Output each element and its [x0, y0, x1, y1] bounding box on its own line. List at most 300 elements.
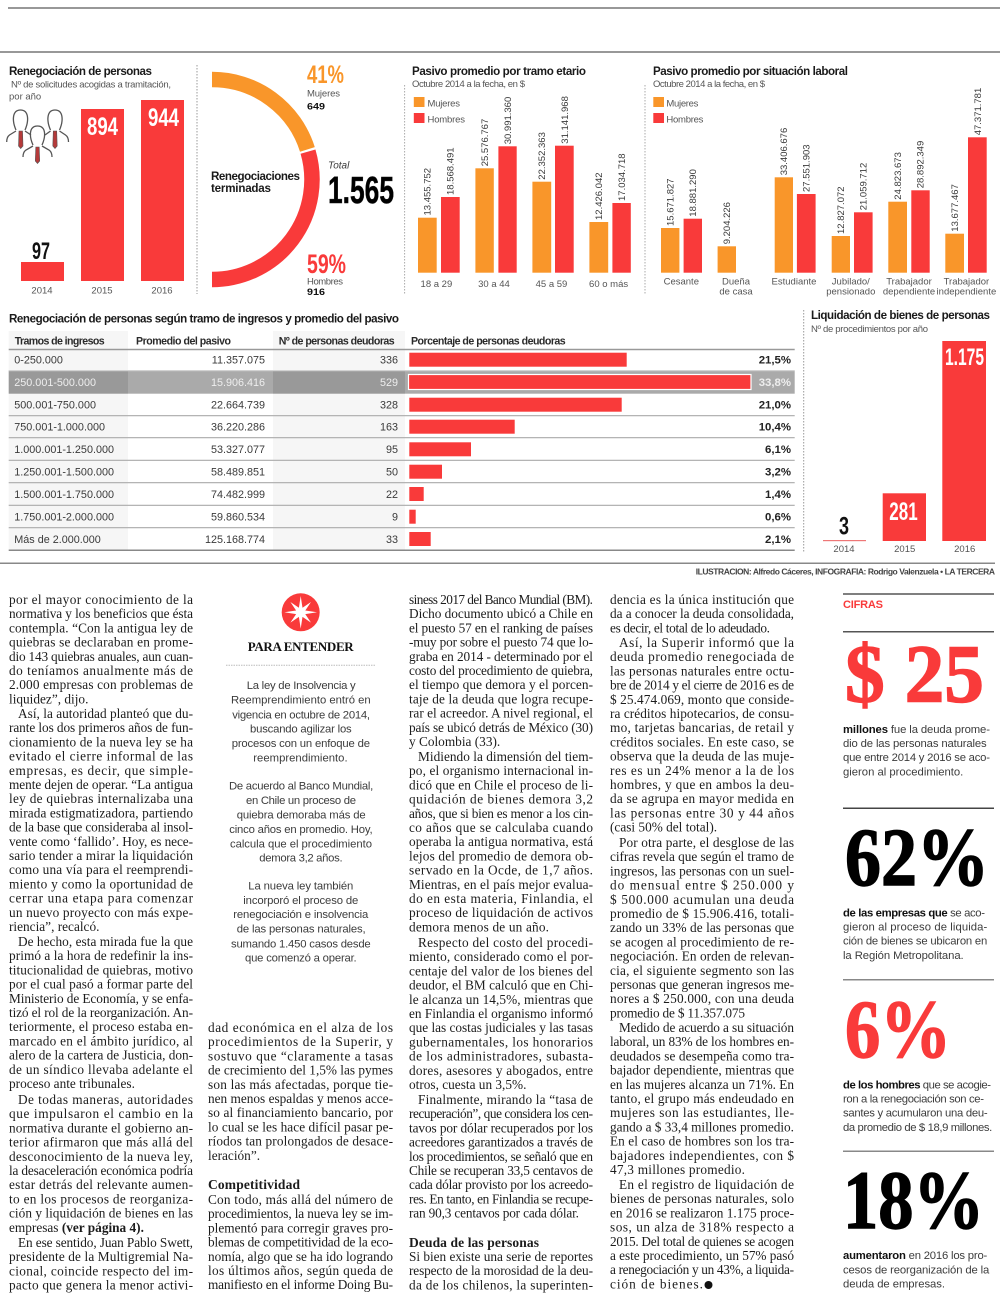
bar chart: situación laboral: 27.551.903: [802, 144, 812, 192]
article column 1: riencia”, recalcó.: [9, 919, 99, 934]
heading: PARA ENTENDER: [248, 639, 354, 654]
panel: para entender: [226, 593, 376, 965]
article column 4: Así, la Superir informó que la: [619, 635, 794, 650]
article column 1: la desaceleración económica podría: [9, 1163, 193, 1178]
column: porcentaje: 2,1%: [765, 534, 791, 546]
article column 2: de crecimiento del 1,5% las pymes: [208, 1063, 393, 1078]
article column 3: respecto de la morosidad de la deu-: [409, 1263, 593, 1278]
article column 3: [409, 592, 593, 1292]
article column 1: quiebras se declaraban en prome-: [9, 635, 193, 650]
article column 3: operaba la antigua normativa, está: [409, 834, 593, 849]
stat: 6%: santes y acumularon una deu-: [843, 1108, 988, 1120]
column: tramos de ingresos: Más de 2.000.000: [14, 534, 101, 546]
article column 1: empresas, es decir, que simple-: [9, 763, 193, 778]
panel: cifras: [843, 594, 994, 1291]
article column 3: rar el acreedor. A nivel regional, el: [409, 706, 593, 721]
legend: Hombres: [666, 114, 704, 126]
article column 1: primó a la hora de redefinir la ins-: [9, 948, 193, 963]
article column 3: co años que se calculaba cuando: [409, 820, 593, 835]
label: hombres: 59%: [307, 249, 346, 279]
bar chart: liquidaciones por año: 2015: [894, 544, 915, 555]
article column 3: ran 90,3 centavos por cada dólar.: [409, 1206, 579, 1221]
bar chart: tramo etario: 18 a 29: [421, 279, 452, 290]
article column 1: mirada estigmatizadora, partiendo: [9, 805, 193, 820]
bar chart: situación laboral: de casa: [719, 286, 753, 298]
article column 4: laboral, un 83% de los hombres en-: [610, 1034, 794, 1049]
bar chart: situación laboral: 18.881.290: [688, 169, 699, 217]
bar chart: tramo etario: 60 o más: [589, 279, 628, 290]
text block: sumando 1.450 casos desde: [231, 938, 371, 950]
text block: buscando agilizar los: [250, 724, 352, 736]
bar chart: tramo etario: 13.455.752: [423, 168, 434, 216]
bar chart: situación laboral: Trabajador: [886, 276, 932, 288]
panel: renegociaciones terminadas: [211, 61, 394, 298]
bar chart: tramo etario: 45 a 59: [536, 279, 567, 290]
article column 4: a este procedimiento, un 57% pasó: [610, 1248, 794, 1263]
article column 1: cional, coincide respecto del im-: [9, 1263, 193, 1278]
column: tramos de ingresos: 250.001-500.000: [14, 377, 96, 389]
article column 1: presidente de la Multigremial Na-: [9, 1249, 193, 1264]
text block: calcula que el procedimiento: [230, 838, 372, 850]
article column 3: que las costas judiciales y las tasas: [409, 1020, 593, 1035]
article column 3: cada dólar provisto por los acreedo-: [409, 1177, 593, 1192]
article column 3: servado en la Ocde, de 1,7 años.: [409, 863, 593, 878]
bar chart: solicitudes por año: 2016: [151, 286, 173, 296]
article column 1: pacto que genera la menor activi-: [9, 1278, 193, 1293]
bar chart: liquidaciones por año: [823, 341, 986, 555]
article column 4: personas que generan ingresos me-: [610, 977, 794, 992]
article column 2: sostuvo que “claramente a tasas: [208, 1048, 393, 1063]
stat: 25 millones: [843, 628, 990, 779]
column: tramos de ingresos: 1.750.001-2.000.000: [14, 512, 114, 524]
column: promedio del pasivo: 74.482.999: [211, 489, 265, 501]
article column 1: cerrar una etapa para comenzar: [9, 891, 194, 906]
article column 2: [208, 1020, 394, 1292]
article column 3: dicó que en Chile el proceso de li-: [409, 777, 593, 792]
legend: Mujeres: [428, 98, 460, 110]
bar chart: liquidaciones por año: 2016: [954, 544, 975, 555]
column: tramos de ingresos: 1.000.001-1.250.000: [14, 444, 114, 456]
heading: Liquidación de bienes de personas: [811, 309, 990, 322]
article column 4: bre de 2014 y el cierre de 2016 es de: [610, 678, 794, 693]
legend: Mujeres: [666, 98, 699, 110]
legend: [653, 97, 704, 126]
column: porcentaje: 33,8%: [759, 377, 791, 389]
legend: Hombres: [428, 114, 465, 126]
stat: 6%: da promedio de $ 18,9 millones.: [843, 1122, 992, 1134]
heading: CIFRAS: [843, 599, 883, 611]
stat: 6%: ron a la renegociación son ce-: [843, 1093, 984, 1105]
table header: [15, 336, 566, 348]
stat: 18%: [843, 1154, 990, 1291]
article column 4: (casi 50% del total).: [610, 820, 717, 835]
stat: 62%: la Región Metropolitana.: [843, 950, 964, 962]
bar chart: tramo etario: 31.141.968: [560, 96, 571, 144]
article column 3: gubernamentales, los honorarios: [409, 1034, 593, 1049]
column: promedio del pasivo: 53.327.077: [211, 444, 265, 456]
article column 2: nomía, algo que se ha ido logrando: [208, 1249, 393, 1264]
bar chart: liquidaciones por año: 281: [889, 498, 918, 526]
article column 2: Competitividad: [208, 1177, 300, 1192]
stat: 25 millones: $ 25: [845, 628, 984, 720]
bar chart: situación laboral: Cesante: [664, 276, 699, 288]
article column 4: promedio de $ 11.357.075: [610, 1005, 745, 1020]
bar chart: solicitudes por año: 2015: [91, 286, 113, 296]
label: centre heading: terminadas: [211, 182, 271, 195]
article column 4: cifras revela que según el tramo de: [610, 849, 794, 864]
column: porcentaje: [759, 355, 791, 546]
article column 1: tizó el rol de la reorganización. An-: [9, 1005, 193, 1020]
bar chart: situación laboral: dependiente: [883, 286, 935, 298]
article column 1: De todas maneras, autoridades: [18, 1092, 193, 1107]
article column 3: res. En tanto, en Finlandia se recupe-: [409, 1191, 593, 1206]
article column 4: En el registro de liquidación de: [619, 1177, 794, 1192]
panel: pasivo por tramo etario: [412, 65, 631, 290]
heading: Pasivo promedio por situación laboral: [653, 65, 848, 78]
article column 4: Medido de acuerdo a su situación: [619, 1020, 794, 1035]
legend: [414, 97, 465, 126]
article column 1: desconocimiento de la nueva ley,: [9, 1149, 193, 1164]
bar chart: situación laboral: 33.406.676: [779, 128, 790, 175]
article column 1: por el mayor conocimiento de la: [9, 592, 193, 607]
label: mujeres: [307, 61, 344, 112]
column: tramos de ingresos: 500.001-750.000: [14, 400, 96, 412]
column: promedio del pasivo: 36.220.286: [211, 422, 265, 434]
article column 1: mente dejen de operar. “La antigua: [9, 777, 193, 792]
article column 4: [610, 592, 794, 1291]
article column 4: bajador dependiente, mientras que: [610, 1063, 794, 1078]
article column 4: se acogen al procedimiento de re-: [610, 934, 794, 949]
icon: compass star: [282, 593, 320, 631]
article column 4: 2015. Del total de quienes se acogen: [610, 1234, 794, 1249]
article column 3: acreedores garantizados a través de: [409, 1135, 593, 1150]
column: porcentaje: 6,1%: [765, 444, 791, 456]
article column 1: ley de quiebras internalizaba una: [9, 791, 193, 806]
article column 4: $ 500.000 acumulan una deuda: [610, 892, 794, 907]
column: tramos de ingresos: [14, 354, 114, 546]
table header: Nº de personas deudoras: [279, 336, 395, 348]
article column 1: En ese sentido, Juan Pablo Swett,: [18, 1235, 193, 1250]
column: personas deudoras: 33: [386, 534, 398, 546]
article column 3: siness 2017 del Banco Mundial (BM).: [409, 592, 593, 607]
article column 4: dencia es la única institución que: [610, 592, 794, 607]
stat: 6%: 6%: [845, 983, 951, 1075]
column: porcentaje: 1,4%: [765, 489, 791, 501]
stat: 6%: de los hombres que se acogie-: [843, 1079, 991, 1091]
article column 1: de la base que consideraba al insol-: [9, 820, 193, 835]
article column 3: Mientras, en el país mejor evalua-: [409, 877, 593, 892]
article column 1: miento y como la oportunidad de: [9, 876, 193, 891]
article column 3: tavos por dólar recuperados por los: [409, 1120, 593, 1135]
stat: 62%: [843, 811, 989, 962]
article column 2: los últimos años, según queda de: [208, 1263, 393, 1278]
article column 4: hombres, y que en ambos la deu-: [610, 777, 794, 792]
article column 1: empresas (ver página 4).: [9, 1220, 144, 1235]
article column 4: do mensual entre $ 250.000 y: [610, 878, 794, 893]
article column 3: le alcanza un 14,5%, mientras que: [409, 992, 593, 1007]
article column 1: 2.000 empresas con problemas de: [9, 677, 193, 692]
article column 1: [9, 592, 194, 1293]
bar chart: situación laboral: 47.371.781: [973, 88, 984, 135]
bar chart: situación laboral: Dueña: [722, 276, 751, 288]
label: hombres: Hombres: [307, 276, 343, 288]
article column 2: nen menos espaldas y menos acce-: [208, 1091, 393, 1106]
bar chart: situación laboral: 15.671.827: [666, 178, 676, 226]
article column 2: procedimientos, la nueva ley se im-: [208, 1206, 393, 1221]
article column 1: normativa y los beneficios que ésta: [9, 606, 193, 621]
article column 3: y Colombia (33).: [409, 734, 500, 749]
text block: La ley de Insolvencia y: [247, 680, 356, 692]
article column 4: las personas naturales entre octu-: [610, 663, 794, 678]
article column 4: ción de bienes.: [610, 1276, 703, 1291]
article column 3: Chile se recuperan 33,5 centavos de: [409, 1163, 593, 1178]
bar chart: tramo etario: 22.352.363: [537, 132, 548, 180]
article column 1: sario tender a mirar la liquidación: [9, 848, 193, 863]
subtitle: Nº de procedimientos por año: [811, 324, 928, 335]
article column 4: deudados se desempeña como tra-: [610, 1048, 794, 1063]
column: porcentaje: 0,6%: [765, 512, 791, 524]
column: promedio del pasivo: 125.168.774: [205, 534, 265, 546]
article column 1: proceso ante tribunales.: [9, 1076, 135, 1091]
article column 3: recuperación”, que considera los cen-: [409, 1106, 593, 1121]
article column 1: do teníamos anualmente más de: [9, 663, 193, 678]
article column 3: años, que si bien es menor a los cin-: [409, 806, 593, 821]
article column 2: leración”.: [208, 1148, 260, 1163]
bar chart: tramo etario: 30.991.360: [503, 97, 514, 144]
article column 3: quidación de bienes demora 3,2: [409, 792, 593, 807]
icon: three people with ties: [7, 110, 68, 164]
stat: 18%: cesos de reorganización de la: [843, 1264, 990, 1276]
article column 4: mo, tarjetas bancarias, de retail y: [610, 720, 794, 735]
article column 4: gando a $ 33,4 millones promedio.: [610, 1119, 794, 1134]
article column 4: promedio de $ 15.906.416, totali-: [610, 906, 794, 921]
article column 1: titucionalidad de quiebras, motivo: [9, 962, 193, 977]
article column 3: costo del procedimiento de quiebra,: [409, 663, 593, 678]
article column 3: país se ubicó detrás de México (30): [409, 720, 593, 735]
label: centre heading: Renegociaciones: [211, 170, 300, 183]
column: tramos de ingresos: 0-250.000: [14, 354, 63, 366]
article column 4: $ 25.474.069, monto que conside-: [610, 692, 794, 707]
article column 4: negociación. En orden de relevan-: [610, 949, 794, 964]
article column 2: blemas de competitividad de la eco-: [208, 1235, 393, 1250]
column: promedio del pasivo: 15.906.416: [211, 377, 265, 389]
bar chart: situación laboral: 9.204.226: [722, 202, 733, 244]
semicircle chart: [212, 79, 312, 279]
article column 2: manifiesto en el informe Doing Bu-: [208, 1277, 393, 1292]
article column 1: alero de la cartera de Justicia, don-: [9, 1048, 193, 1063]
subtitle: Nº de solicitudes acogidas a tramitación,: [11, 80, 171, 90]
column: porcentaje: 10,4%: [759, 422, 791, 434]
stat: 25 millones: que entre 2014 y 2016 se aco-: [843, 752, 990, 764]
article column 1: De hecho, esta mirada fue la que: [18, 934, 193, 949]
column: personas deudoras: 50: [386, 466, 398, 478]
column: personas deudoras: 336: [380, 354, 398, 366]
label: total: 1.565: [328, 170, 394, 212]
column: personas deudoras: 9: [392, 512, 398, 524]
heading: Renegociación de personas según tramo de ingresos y promedio del pasivo: [9, 312, 399, 326]
article column 4: deuda promedio renegociada de: [610, 649, 794, 664]
column: personas deudoras: 163: [380, 422, 398, 434]
article column 1: rante los dos primeros años de fun-: [9, 720, 193, 735]
column: tramos de ingresos: 750.001-1.000.000: [14, 422, 105, 434]
article column 1: liquidez”, dijo.: [9, 691, 88, 706]
text block: quiebra demoraba más de: [237, 809, 366, 821]
table header: Tramos de ingresos: [15, 336, 105, 348]
article column 2: ríodos tan prolongados de desace-: [208, 1134, 393, 1149]
article column 4: sos, un alza de 318% respecto a: [610, 1220, 794, 1235]
column: promedio del pasivo: 22.664.739: [211, 400, 265, 412]
table stripes and highlight row: [9, 331, 795, 550]
text block: Reemprendimiento entró en: [231, 695, 371, 707]
table header: Promedio del pasivo: [136, 336, 232, 348]
bar chart: situación laboral: independiente: [937, 286, 996, 298]
article column 3: de los administradores, subasta-: [409, 1049, 593, 1064]
article column 3: demora menos de un año.: [409, 919, 549, 934]
text block: De acuerdo al Banco Mundial,: [229, 781, 373, 793]
bar chart: situación laboral: pensionado: [826, 286, 875, 298]
article column 3: el puesto 57 en el ranking de países: [409, 620, 593, 635]
article column 1: Ministerio de Economía, y se enfa-: [9, 991, 193, 1006]
article column 3: lejos del promedio de demora ob-: [409, 848, 593, 863]
bar chart: liquidaciones por año: 2014: [833, 544, 855, 555]
bar chart: liquidaciones por año: 3: [839, 512, 849, 540]
bar chart: tramo etario: 30 a 44: [478, 279, 510, 290]
stat: 62%: gieron al proceso de liquida-: [843, 921, 988, 933]
text block: procesos con un enfoque de: [232, 738, 370, 750]
column: personas deudoras: 328: [380, 400, 398, 412]
article column 3: da de los chilenos, la superinten-: [409, 1277, 593, 1292]
article column 3: graba en 2014 - determinado por el: [409, 649, 593, 664]
bar chart: tramo etario: 12.426.042: [594, 172, 605, 220]
label: total: [328, 160, 394, 212]
column: promedio del pasivo: 59.860.534: [211, 512, 265, 524]
article column 3: taje de la deuda que logra recupe-: [409, 691, 593, 706]
bar chart: situación laboral: 12.827.072: [836, 186, 847, 234]
bar chart: solicitudes por año: 894: [87, 113, 118, 141]
article column 4: Por otra parte, el desglose de las: [619, 835, 794, 850]
article column 3: deudor, el BM calculó que en Chi-: [409, 978, 593, 993]
article column 2: lo cual se les hace difícil pasar pe-: [208, 1119, 393, 1134]
article column 1: como una vía para el reemprendi-: [9, 862, 193, 877]
subtitle: [9, 80, 171, 102]
article column 1: vente como ‘fallido’. Hoy, es nece-: [9, 834, 193, 849]
column: promedio del pasivo: 58.489.851: [211, 466, 265, 478]
bar chart: tramo etario: 17.034.718: [617, 153, 628, 201]
stat: 62%: de las empresas que se aco-: [843, 907, 985, 919]
article column 4: ingresos, las personas con un suel-: [610, 863, 794, 878]
bar chart: situación laboral: [661, 88, 996, 298]
article column 3: centaje del valor de los bienes del: [409, 963, 593, 978]
article column 3: en Finlandia el organismo informó: [409, 1006, 593, 1021]
article column 4: da se agrupa en mayor medida en: [610, 791, 794, 806]
article column 2: procedimientos de la Superir, y: [208, 1034, 393, 1049]
article column 2: so al financiamiento bancario, por: [208, 1105, 394, 1120]
text block: cinco años en promedio. Hoy,: [229, 824, 373, 836]
bar chart: tramo etario: 25.576.767: [480, 119, 491, 166]
article column 3: po, el organismo internacional in-: [409, 763, 593, 778]
article column 1: teriormente, el proceso estaba en-: [9, 1019, 193, 1034]
text block: demora 3,2 años.: [259, 852, 343, 864]
stat: 25 millones: gieron al procedimiento.: [843, 767, 963, 779]
text block: de las personas naturales,: [237, 923, 366, 935]
credits: ILUSTRACION: Alfredo Cáceres, INFOGRAFIA: Rodrigo Valenzuela • LA TERCERA: [696, 566, 995, 576]
article column 3: los procedimientos, se señaló que en: [409, 1149, 593, 1164]
label: hombres: [307, 249, 346, 298]
percentage bars: [408, 353, 751, 546]
panel: renegociación de personas: [7, 65, 184, 296]
label: hombres: 916: [307, 287, 325, 298]
article column 3: Midiendo la dimensión del tiem-: [418, 749, 593, 764]
stat: 25 millones: dio de las personas naturales: [843, 738, 987, 750]
article column 4: nores a $ 250.000, con una deuda: [610, 991, 794, 1006]
panel: tabla de ingresos: [9, 312, 795, 550]
panel: liquidación de bienes: [811, 309, 990, 555]
stat: 18%: deuda de empresas.: [843, 1279, 945, 1291]
article column 4: en las mujeres alcanza un 71%. En: [610, 1077, 794, 1092]
label: mujeres: Mujeres: [307, 88, 340, 100]
table rules: [9, 350, 795, 550]
bar chart: solicitudes por año: [21, 100, 184, 296]
article column 3: dores, asesores y abogados, entre: [409, 1063, 593, 1078]
label: centre heading: [211, 170, 300, 195]
article column 1: Así, la autoridad planteó que du-: [18, 706, 193, 721]
article column 2: plementó para corregir graves pro-: [208, 1220, 393, 1235]
article column 4: 47,3 millones promedio.: [610, 1162, 745, 1177]
article column 1: terior afirmaron que más allá del: [9, 1135, 193, 1150]
text block: renegociación e insolvencia: [233, 909, 369, 921]
column: porcentaje: 21,5%: [759, 355, 791, 367]
article column 3: Dicho documento ubicó a Chile en: [409, 606, 593, 621]
column: tramos de ingresos: 1.250.001-1.500.000: [14, 466, 114, 478]
article column 1: por el cual pasó a formar parte del: [9, 977, 193, 992]
article column 3: Finalmente, mirando la “tasa de: [418, 1092, 593, 1107]
bar chart: solicitudes por año: 944: [148, 104, 179, 132]
table header: Porcentaje de personas deudoras: [411, 336, 566, 348]
article column 1: de un síndico llevaba adelante el: [9, 1062, 193, 1077]
article column 4: bajadores independientes, con $: [610, 1148, 794, 1163]
article column 4: En el caso de hombres son los tra-: [610, 1134, 794, 1149]
article column 1: dio 143 quiebras anuales, aun cuan-: [9, 649, 193, 664]
heading: Pasivo promedio por tramo etario: [412, 65, 586, 78]
subtitle: por año: [9, 92, 41, 102]
bar chart: solicitudes por año: 2014: [31, 286, 53, 296]
label: total: Total: [328, 160, 350, 172]
article column 3: Si bien existe una serie de reportes: [409, 1249, 593, 1264]
bar chart: situación laboral: Jubilado/: [832, 276, 870, 288]
article column 3: do en esta materia, Finlandia, el: [409, 891, 593, 906]
article column 1: to en los procesos de reorganiza-: [9, 1191, 193, 1206]
column: porcentaje: 21,0%: [759, 400, 791, 412]
article column 1: marcado en el ámbito jurídico, al: [9, 1033, 193, 1048]
bar chart: situación laboral: 28.892.349: [916, 141, 926, 188]
text block: [229, 680, 373, 965]
article column 1: estar detrás del relevante aumen-: [9, 1177, 193, 1192]
bar chart: situación laboral: Trabajador: [944, 276, 989, 288]
bar chart: situación laboral: Estudiante: [772, 276, 816, 288]
article column 2: dad económica en el alza de los: [208, 1020, 393, 1035]
column: porcentaje: 3,2%: [765, 467, 791, 479]
article column 4: cia, el siguiente segmento son las: [610, 963, 794, 978]
article column 4: res es un 24% menor a la de los: [610, 763, 794, 778]
column: personas deudoras: [380, 354, 398, 546]
column: personas deudoras: 22: [386, 489, 398, 501]
article column 4: es decir, el total de lo adeudado.: [610, 620, 770, 635]
column: promedio del pasivo: [205, 354, 265, 546]
label: mujeres: 41%: [307, 61, 344, 89]
article column 3: Deuda de las personas: [409, 1235, 539, 1250]
stat: 62%: ción de bienes se ubicaron en: [843, 936, 987, 948]
article column 4: da a conocer la deuda consolidada,: [610, 606, 794, 621]
